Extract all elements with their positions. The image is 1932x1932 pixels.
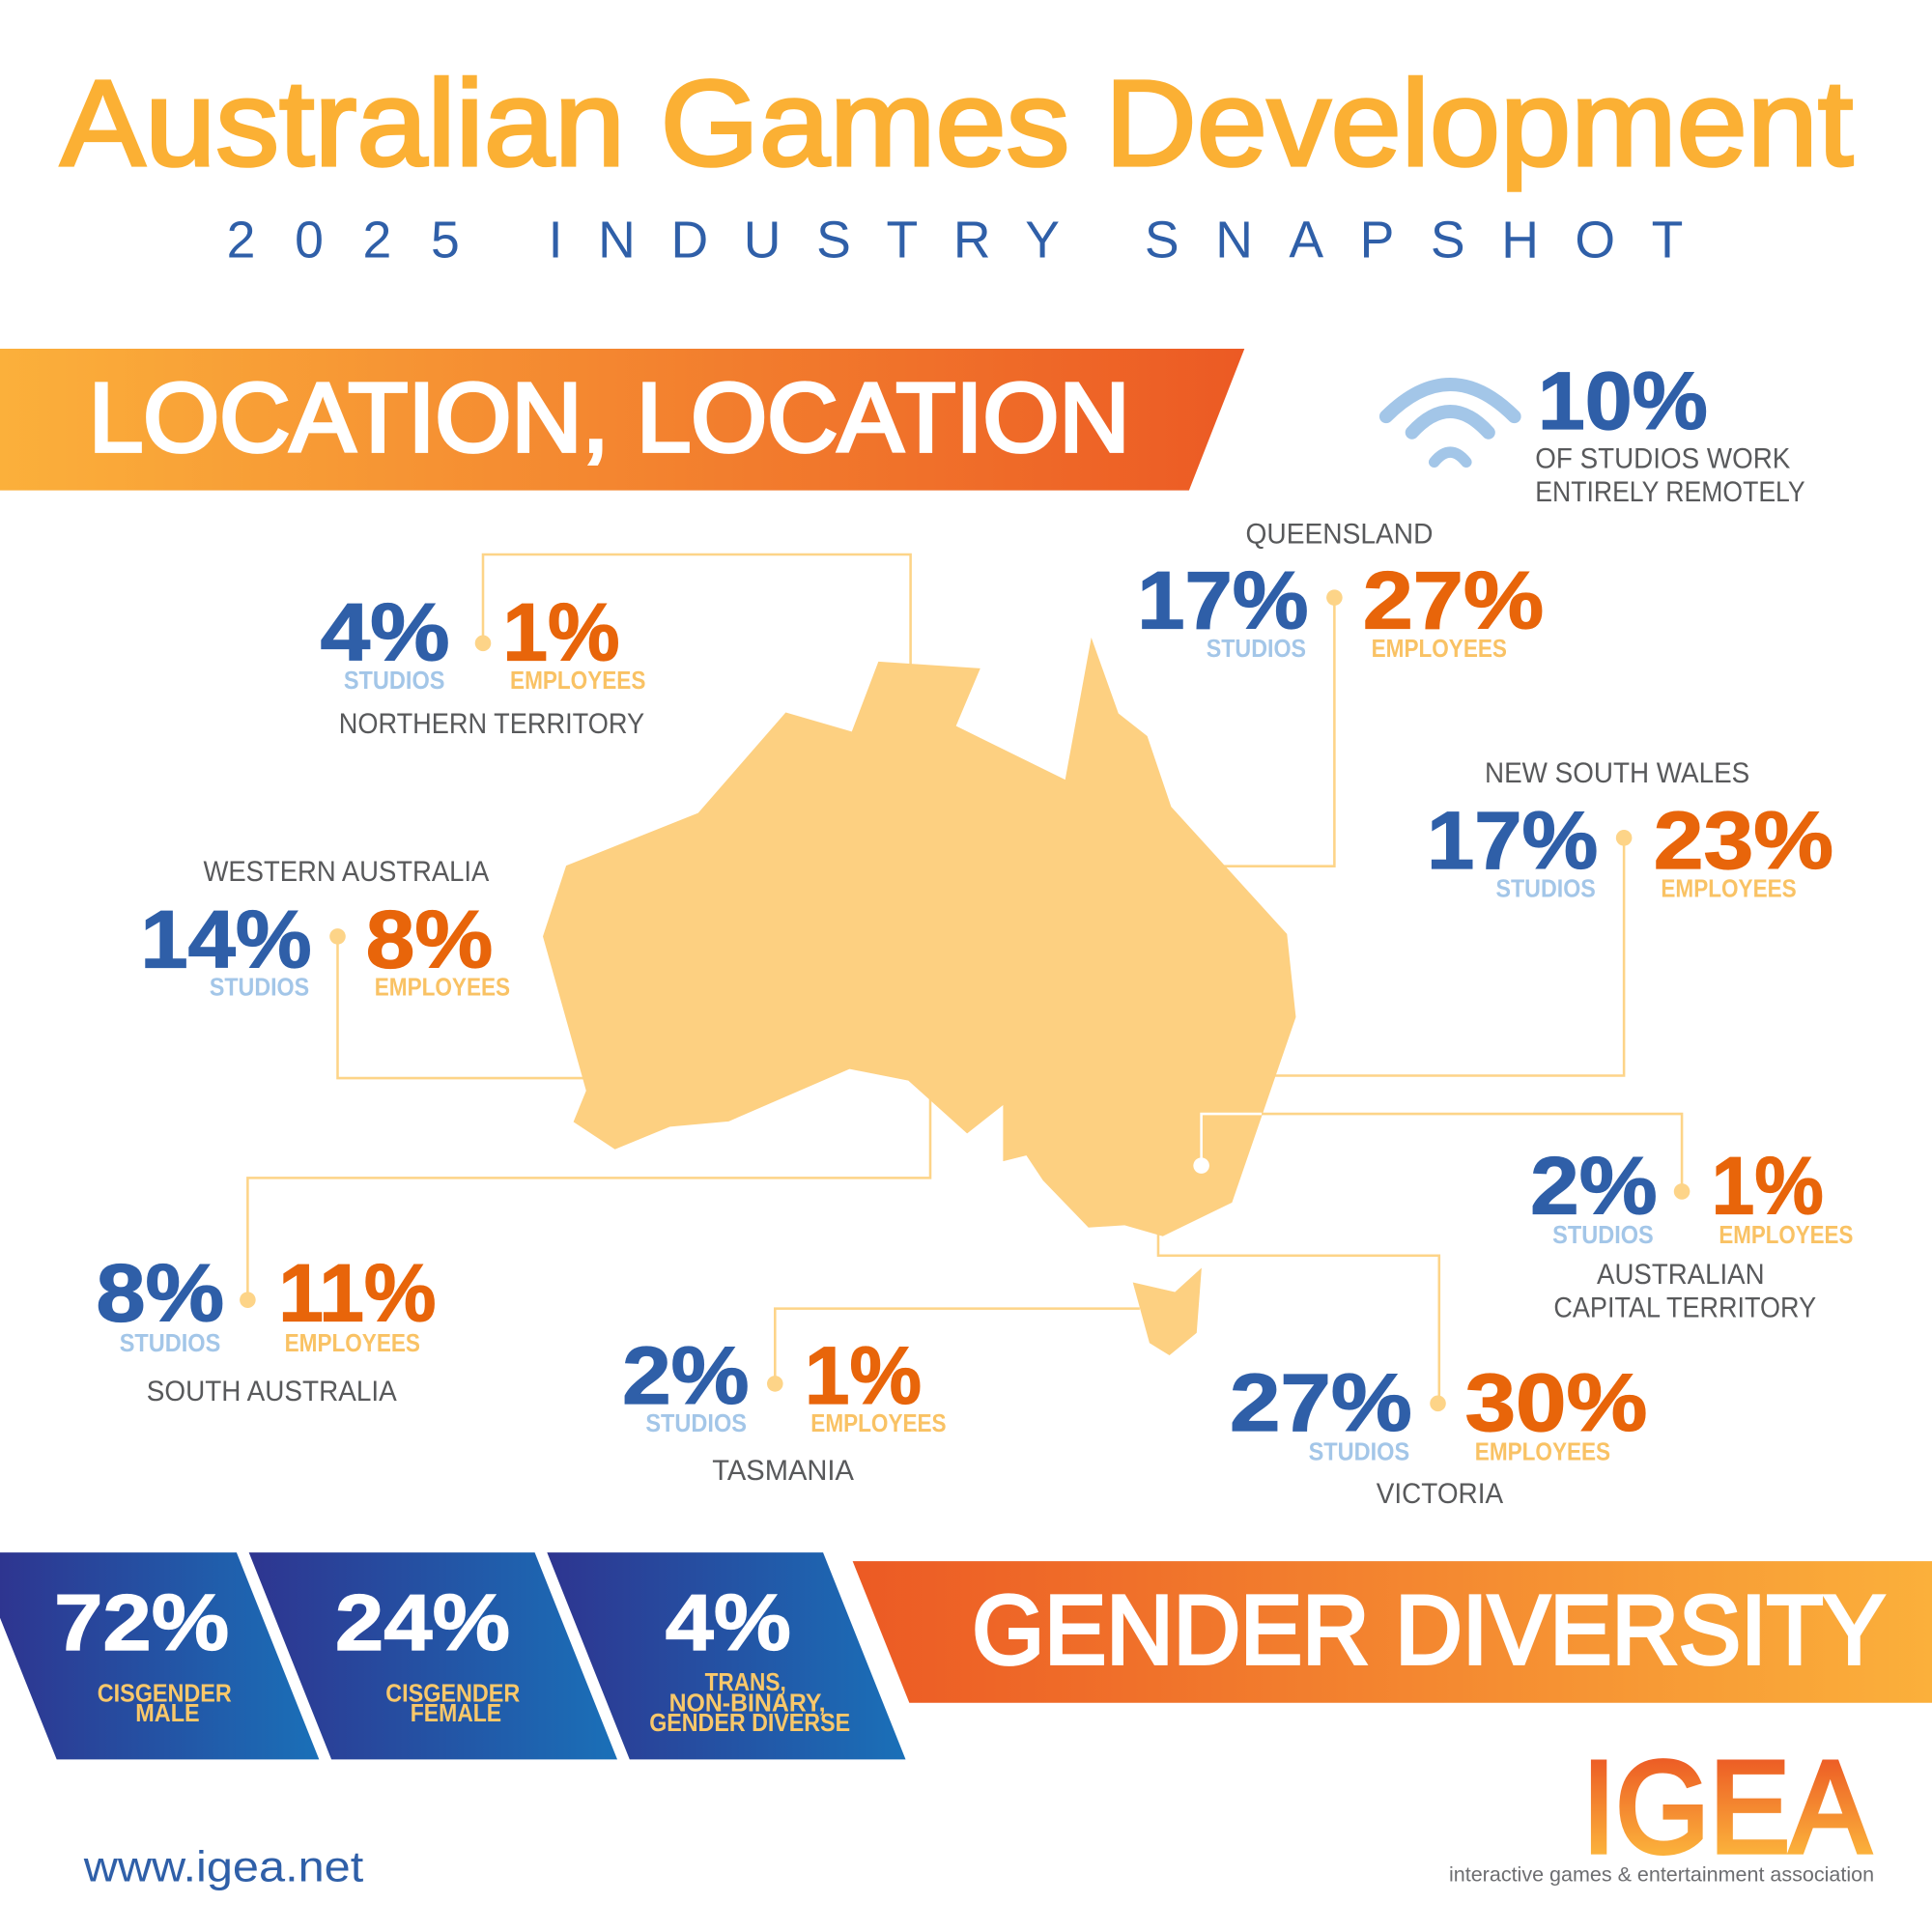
logo: IGEA — [1449, 1734, 1874, 1887]
stat: Tasmania: 2% — [622, 1330, 750, 1421]
stat: Queensland — [1137, 518, 1544, 663]
logo: IGEA: IGEA — [1582, 1734, 1870, 1880]
subtitle: 2025 — [227, 213, 460, 270]
stat: Western Australia: STUDIOS — [210, 975, 309, 1002]
stat: Northern Territory: NORTHERN TERRITORY — [339, 708, 644, 740]
stat: Queensland: STUDIOS — [1207, 636, 1306, 663]
stat: South Australia: 8% — [96, 1247, 224, 1338]
stat: Northern Territory — [321, 587, 645, 740]
panel: trans, non-binary, gender diverse: TRANS, — [705, 1669, 786, 1696]
stat: Victoria: VICTORIA — [1377, 1478, 1503, 1510]
stat: New South Wales: 23% — [1654, 795, 1833, 886]
stat: Victoria: EMPLOYEES — [1475, 1438, 1610, 1465]
stat: Victoria: 27% — [1230, 1357, 1412, 1448]
stat: Northern Territory: EMPLOYEES — [510, 668, 645, 695]
panel: trans, non-binary, gender diverse: GENDER DIVERSE — [649, 1710, 850, 1737]
stat: South Australia: SOUTH AUSTRALIA — [147, 1376, 397, 1407]
stat: Tasmania: TASMANIA — [712, 1455, 854, 1487]
stat: Victoria: 30% — [1465, 1357, 1647, 1448]
panel: trans, non-binary, gender diverse: 4% — [666, 1577, 791, 1667]
stat: Australian Capital Territory: EMPLOYEES — [1719, 1222, 1853, 1249]
panel: trans, non-binary, gender diverse — [547, 1552, 906, 1759]
stat: New South Wales: EMPLOYEES — [1661, 876, 1797, 903]
stat: Australian Capital Territory: AUSTRALIAN — [1597, 1259, 1765, 1291]
stat: Queensland: EMPLOYEES — [1372, 636, 1507, 663]
subtitle: SNAPSHOT — [1145, 213, 1683, 270]
stat: Western Australia: 8% — [366, 894, 493, 984]
connector lines behind map — [247, 554, 1682, 1404]
stat: South Australia: 11% — [278, 1247, 437, 1338]
panel: cisgender female: FEMALE — [411, 1700, 501, 1727]
stat: New South Wales: NEW SOUTH WALES — [1485, 757, 1749, 789]
banner: location: LOCATION, LOCATION — [89, 364, 1130, 472]
remote work callout: OF STUDIOS WORK — [1535, 443, 1790, 475]
ACT marker on map — [1193, 1114, 1262, 1174]
logo: IGEA: interactive games & entertainment association — [1449, 1862, 1874, 1887]
panel: cisgender male: 72% — [54, 1577, 229, 1667]
panel: cisgender male: MALE — [135, 1700, 200, 1727]
map: Tasmania — [1133, 1267, 1202, 1355]
stat: Tasmania — [622, 1330, 947, 1487]
stat: Northern Territory: STUDIOS — [344, 668, 444, 695]
stat: Northern Territory: 4% — [321, 587, 450, 678]
banner: gender diversity: GENDER DIVERSITY — [972, 1577, 1886, 1685]
stat: Australian Capital Territory: STUDIOS — [1552, 1222, 1654, 1249]
stat: South Australia: STUDIOS — [120, 1330, 220, 1357]
title: Australian Games Development — [60, 55, 1853, 191]
stat: South Australia: EMPLOYEES — [285, 1330, 420, 1357]
stat: South Australia — [96, 1247, 437, 1407]
stat: Australian Capital Territory: CAPITAL TERRITORY — [1553, 1293, 1816, 1324]
icon: wifi — [1386, 384, 1515, 462]
stat: Western Australia: EMPLOYEES — [375, 975, 510, 1002]
subtitle — [227, 213, 1683, 270]
stat: Tasmania: EMPLOYEES — [810, 1410, 947, 1437]
stat: Western Australia: 14% — [140, 894, 312, 984]
stat: Western Australia — [140, 856, 510, 1002]
stat: Western Australia: WESTERN AUSTRALIA — [203, 856, 489, 888]
stat: Victoria: STUDIOS — [1309, 1438, 1409, 1465]
remote work callout — [1386, 355, 1805, 508]
subtitle: INDUSTRY — [549, 213, 1060, 270]
stat: Queensland: QUEENSLAND — [1246, 518, 1433, 550]
stat: Victoria — [1230, 1357, 1647, 1510]
stat: New South Wales: 17% — [1427, 795, 1598, 886]
banner: gender diversity — [853, 1561, 1932, 1703]
stat: Tasmania: 1% — [805, 1330, 922, 1421]
map: Australia — [543, 638, 1295, 1236]
stat: Australian Capital Territory: 1% — [1712, 1140, 1824, 1231]
stat: Queensland: 17% — [1137, 555, 1309, 646]
panel: trans, non-binary, gender diverse: NON-BINARY, — [669, 1690, 826, 1718]
panel: cisgender male: CISGENDER — [98, 1680, 232, 1707]
stat: Australian Capital Territory — [1530, 1140, 1853, 1324]
stat: Northern Territory: 1% — [502, 587, 620, 678]
panel: cisgender female — [249, 1552, 617, 1759]
panel: cisgender female: 24% — [335, 1577, 510, 1667]
stat: New South Wales — [1427, 757, 1833, 903]
remote work callout: ENTIRELY REMOTELY — [1535, 476, 1805, 508]
stat: New South Wales: STUDIOS — [1495, 876, 1596, 903]
remote work callout: 10% — [1538, 355, 1708, 446]
panel: cisgender male — [0, 1552, 319, 1759]
stat: Queensland: 27% — [1363, 555, 1544, 646]
website: www.igea.net — [83, 1844, 364, 1891]
stat: Australian Capital Territory: 2% — [1530, 1140, 1658, 1231]
stat: Tasmania: STUDIOS — [645, 1410, 747, 1437]
banner: location — [0, 349, 1244, 491]
panel: cisgender female: CISGENDER — [385, 1680, 520, 1707]
